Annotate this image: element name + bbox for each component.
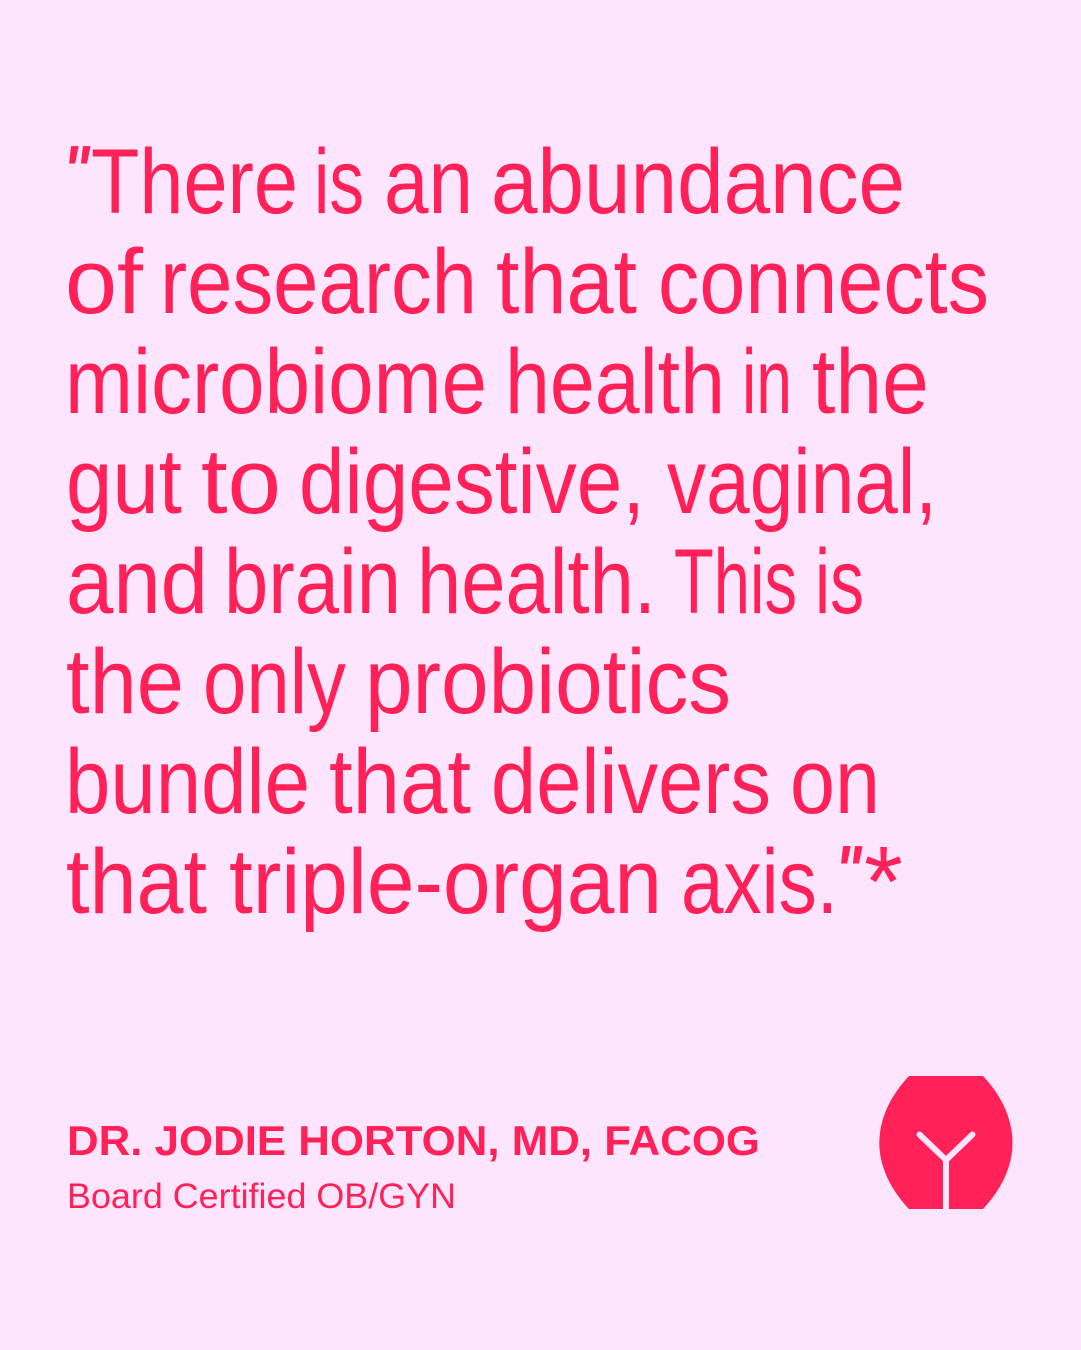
quote text: only — [203, 631, 346, 733]
quote text: and — [66, 531, 208, 633]
quote text: that — [496, 231, 637, 333]
quote text: to — [201, 431, 281, 533]
quote text: the — [812, 331, 929, 433]
quote text: gut — [66, 431, 182, 533]
quote text: that — [66, 831, 207, 933]
quote text: is — [314, 131, 364, 233]
quote text: connects — [658, 231, 989, 333]
quote text: abundance — [491, 131, 905, 233]
quote text: of — [65, 231, 143, 333]
quote text: on — [790, 731, 880, 833]
quote text: digestive, — [299, 431, 645, 533]
quote text: " — [63, 131, 91, 209]
quote text: an — [384, 131, 473, 233]
quote text: triple-organ — [229, 831, 662, 933]
quote text: brain — [224, 531, 401, 633]
quote text: There — [91, 131, 298, 233]
quote text: delivers — [491, 731, 771, 833]
quote text: " — [835, 831, 863, 909]
quote text: in — [742, 331, 792, 433]
quote text — [63, 131, 989, 938]
quote text: is — [815, 531, 864, 633]
quote text: the — [66, 631, 184, 733]
quote text: * — [864, 826, 903, 938]
quote text: probiotics — [365, 631, 731, 733]
quote text: vaginal, — [667, 431, 937, 533]
quote text: axis. — [681, 831, 838, 933]
quote text: health. — [417, 531, 656, 633]
quote text: microbiome — [65, 331, 487, 433]
quote text: that — [329, 731, 471, 833]
icon: logo — [879, 1076, 1012, 1209]
quote text: health — [505, 331, 725, 433]
quote text: This — [674, 531, 797, 633]
quote text: bundle — [65, 731, 310, 833]
quote text: research — [160, 231, 477, 333]
attribution credential: Board Certified OB/GYN — [67, 1177, 456, 1216]
attribution name: DR. JODIE HORTON, MD, FACOG — [67, 1117, 760, 1164]
